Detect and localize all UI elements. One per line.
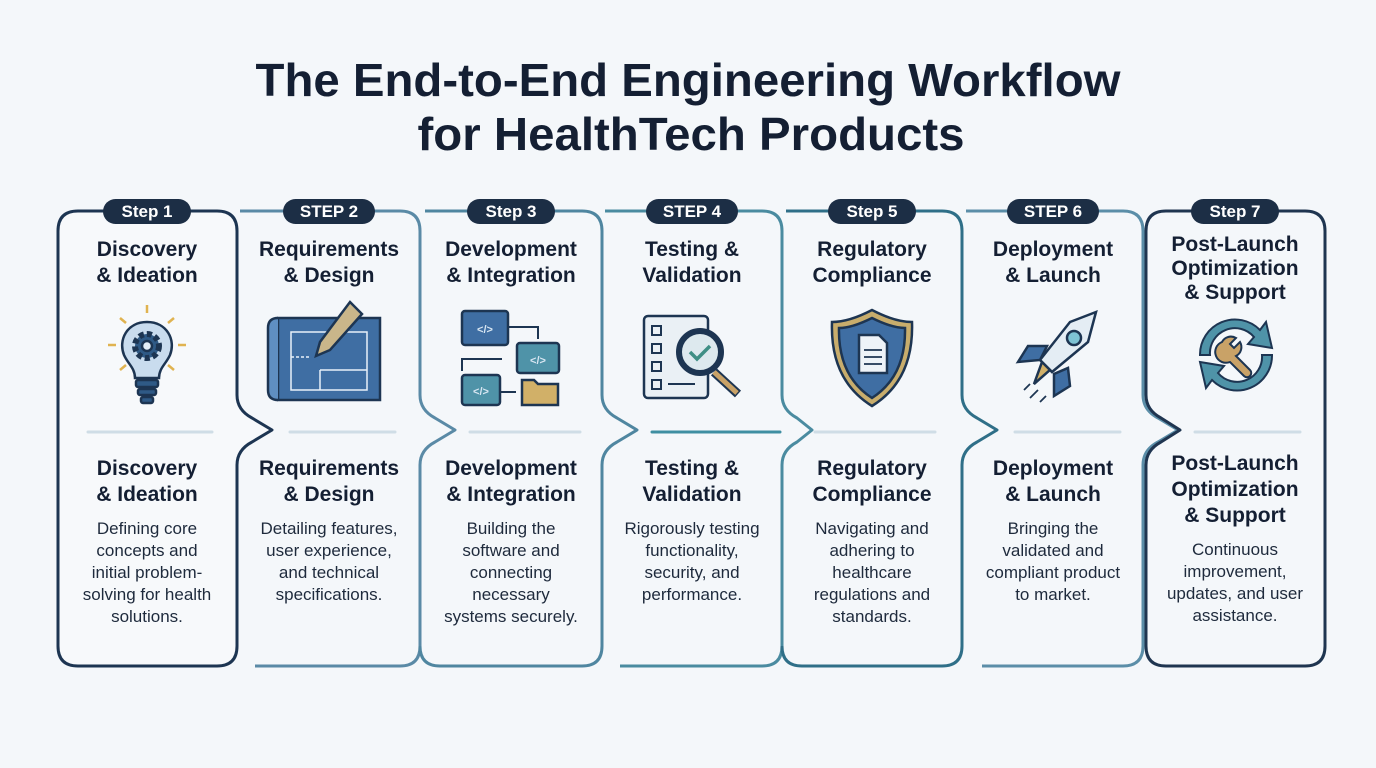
bottom headings: & Launch bbox=[1005, 483, 1101, 506]
icon: code flow: </> bbox=[473, 386, 489, 398]
descriptions: software and bbox=[462, 541, 560, 560]
descriptions: Rigorously testing bbox=[624, 519, 760, 538]
descriptions: Defining core bbox=[97, 519, 197, 538]
descriptions: to market. bbox=[1015, 585, 1091, 604]
bottom headings: Discovery bbox=[97, 457, 198, 480]
icon: code flow: </> bbox=[530, 355, 546, 367]
step pills: STEP 2 bbox=[300, 202, 358, 221]
descriptions: improvement, bbox=[1184, 562, 1286, 581]
panel: step 5 bbox=[782, 211, 997, 666]
descriptions: specifications. bbox=[276, 585, 382, 604]
descriptions bbox=[83, 519, 1303, 626]
icon: cycle wrench bbox=[1200, 319, 1272, 391]
icon: lightbulb bbox=[108, 305, 186, 403]
bottom headings: Regulatory bbox=[817, 457, 927, 480]
descriptions: connecting bbox=[470, 563, 552, 582]
descriptions: assistance. bbox=[1192, 606, 1278, 625]
icon: rocket bbox=[1018, 312, 1096, 402]
panel: step 4 bbox=[605, 211, 812, 666]
bottom headings: & Integration bbox=[446, 483, 576, 506]
descriptions: performance. bbox=[642, 585, 742, 604]
panel: step 1 bbox=[58, 211, 272, 666]
descriptions: regulations and bbox=[814, 585, 930, 604]
title bbox=[256, 54, 1121, 160]
step pills: Step 5 bbox=[846, 202, 898, 221]
top headings: Requirements bbox=[259, 238, 399, 261]
descriptions: validated and bbox=[1002, 541, 1104, 560]
descriptions: Detailing features, bbox=[260, 519, 398, 538]
step pills bbox=[103, 199, 1279, 224]
descriptions: and technical bbox=[279, 563, 379, 582]
top headings: Regulatory bbox=[817, 238, 927, 261]
panel: step 6 bbox=[966, 211, 1178, 666]
step pills: Step 3 bbox=[485, 202, 537, 221]
descriptions: necessary bbox=[472, 585, 550, 604]
descriptions: Bringing the bbox=[1008, 519, 1098, 538]
descriptions: security, and bbox=[644, 563, 740, 582]
descriptions: Navigating and bbox=[815, 519, 929, 538]
bottom headings bbox=[96, 452, 1299, 527]
top headings: & Launch bbox=[1005, 264, 1101, 287]
descriptions: adhering to bbox=[829, 541, 915, 560]
top headings: & Ideation bbox=[96, 264, 198, 287]
descriptions: updates, and user bbox=[1167, 584, 1303, 603]
bottom headings: Validation bbox=[642, 483, 742, 506]
descriptions: user experience, bbox=[266, 541, 392, 560]
title: for HealthTech Products bbox=[418, 108, 964, 160]
descriptions: compliant product bbox=[986, 563, 1120, 582]
step pills: STEP 6 bbox=[1024, 202, 1082, 221]
step pills: Step 1 bbox=[121, 202, 173, 221]
descriptions: Building the bbox=[467, 519, 555, 538]
top headings bbox=[96, 233, 1299, 304]
bottom headings: Compliance bbox=[812, 483, 932, 506]
bottom headings: Deployment bbox=[993, 457, 1113, 480]
descriptions: Continuous bbox=[1192, 540, 1278, 559]
bottom headings: & Ideation bbox=[96, 483, 198, 506]
top headings: Deployment bbox=[993, 238, 1113, 261]
panel: step 3 bbox=[420, 211, 637, 666]
step pills: Step 7 bbox=[1209, 202, 1261, 221]
bottom headings: Requirements bbox=[259, 457, 399, 480]
bottom headings: Development bbox=[445, 457, 577, 480]
bottom headings: Testing & bbox=[645, 457, 739, 480]
panel: step 2 bbox=[240, 211, 455, 666]
descriptions: systems securely. bbox=[444, 607, 578, 626]
panel: step 7 bbox=[1146, 211, 1325, 666]
icon: checklist magnifier bbox=[644, 316, 738, 398]
dividers bbox=[88, 430, 1300, 434]
top headings: Compliance bbox=[812, 264, 932, 287]
top headings: Discovery bbox=[97, 238, 198, 261]
descriptions: healthcare bbox=[832, 563, 912, 582]
bottom headings: Optimization bbox=[1171, 478, 1299, 501]
step pills: STEP 4 bbox=[663, 202, 722, 221]
icon: blueprint bbox=[268, 302, 380, 400]
bottom headings: & Support bbox=[1184, 504, 1286, 527]
descriptions: initial problem- bbox=[92, 563, 202, 582]
descriptions: solutions. bbox=[111, 607, 183, 626]
top headings: & Support bbox=[1184, 281, 1286, 304]
descriptions: concepts and bbox=[96, 541, 198, 560]
descriptions: functionality, bbox=[645, 541, 739, 560]
top headings: Testing & bbox=[645, 238, 739, 261]
bottom headings: Post-Launch bbox=[1171, 452, 1299, 475]
icon: shield bbox=[832, 310, 912, 406]
top headings: & Integration bbox=[446, 264, 576, 287]
top headings: Optimization bbox=[1171, 257, 1299, 280]
top headings: & Design bbox=[283, 264, 375, 287]
icon: code flow: </> bbox=[477, 324, 493, 336]
bottom headings: & Design bbox=[283, 483, 375, 506]
descriptions: solving for health bbox=[83, 585, 211, 604]
top headings: Post-Launch bbox=[1171, 233, 1299, 256]
top headings: Validation bbox=[642, 264, 742, 287]
title: The End-to-End Engineering Workflow bbox=[256, 54, 1121, 106]
top headings: Development bbox=[445, 238, 577, 261]
icon: code flow bbox=[462, 311, 559, 405]
descriptions: standards. bbox=[832, 607, 912, 626]
